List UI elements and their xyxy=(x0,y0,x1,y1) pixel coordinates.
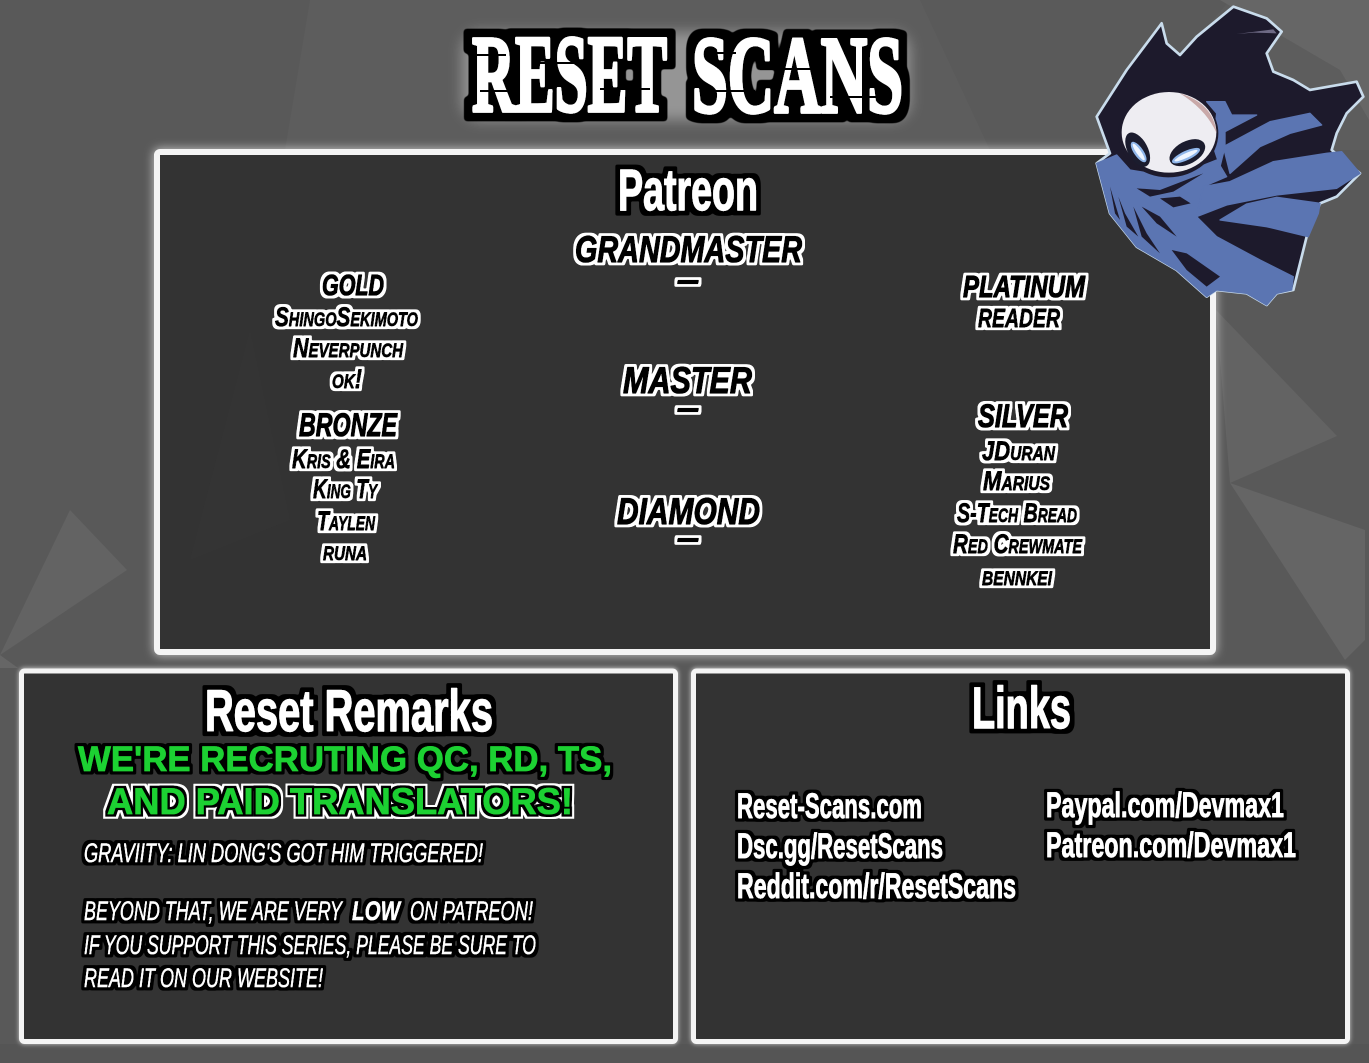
link list: right column xyxy=(1046,786,1296,865)
panel: Links xyxy=(691,668,1350,1044)
recruiting notice line 2: AND PAID TRANSLATORS! xyxy=(107,781,573,822)
tier: Silver: Red Crewmate xyxy=(953,529,1083,559)
remark: Patreon appeal: ON PATREON! xyxy=(410,896,533,926)
title word: RESET: RESET xyxy=(472,13,667,135)
link list: left column: Reset-Scans.com xyxy=(737,787,922,826)
mascot dark cloak xyxy=(1097,7,1363,305)
tier: Grandmaster: GRANDMASTER xyxy=(575,229,802,270)
link list: left column: Dsc.gg/ResetScans xyxy=(737,827,943,866)
tier: Grandmaster xyxy=(575,229,802,297)
tier: Silver: SILVER xyxy=(978,398,1068,434)
title word: SCANS: SCANS xyxy=(692,14,903,136)
tier: Bronze: King Ty xyxy=(313,474,379,504)
tier: Diamond xyxy=(617,491,760,555)
tier: Bronze: Taylen xyxy=(317,506,376,536)
tier: Master: – xyxy=(677,392,699,425)
tier: Gold: GOLD xyxy=(322,270,384,302)
tier: Platinum: READER xyxy=(978,303,1060,333)
tier: Bronze: Kris & Eira xyxy=(292,444,395,474)
mascot blue scarf xyxy=(1097,102,1360,305)
tier: Silver xyxy=(953,398,1083,591)
tier: Silver: Marius xyxy=(983,466,1050,496)
tier: Gold: ShingoSekimoto xyxy=(275,302,418,332)
tier: Gold xyxy=(275,270,418,394)
remark: Gravity: GRAVIITY: LIN DONG'S GOT HIM TRIGGERED! xyxy=(84,838,483,868)
tier: Bronze xyxy=(292,407,398,566)
panel: Patreon supporters xyxy=(154,149,1216,655)
tier: Gold: ok! xyxy=(332,364,362,394)
title: Reset Scans logo xyxy=(462,13,910,136)
remark: Patreon appeal: IF YOU SUPPORT THIS SERIES, PLEASE BE SURE TO xyxy=(84,930,536,960)
tier: Silver: S-Tech Bread xyxy=(957,498,1077,528)
link list: left column xyxy=(737,787,1016,906)
tier: Bronze: BRONZE xyxy=(299,407,398,443)
tier: Silver: JDuran xyxy=(982,436,1056,466)
icon: hooded mascot character xyxy=(1097,7,1363,305)
tier: Grandmaster: – xyxy=(677,264,699,297)
tier: Diamond: – xyxy=(677,522,699,555)
mascot eyes xyxy=(1120,128,1210,172)
heading: Reset Remarks: Reset Remarks xyxy=(205,679,493,744)
recruiting notice line 1: WE'RE RECRUTING QC, RD, TS, xyxy=(78,740,612,779)
tier: Master: MASTER xyxy=(623,360,752,401)
mascot highlight xyxy=(1237,29,1277,34)
remark: Patreon appeal xyxy=(84,896,536,993)
heading: Patreon: Patreon xyxy=(618,158,758,223)
tier: Platinum xyxy=(963,269,1086,333)
links frame xyxy=(694,671,1348,1042)
link list: left column: Reddit.com/r/ResetScans xyxy=(737,867,1016,906)
panel frame xyxy=(157,152,1213,652)
tier: Diamond: DIAMOND xyxy=(617,491,760,532)
tier: Bronze: runa xyxy=(323,536,367,566)
remark: Patreon appeal: READ IT ON OUR WEBSITE! xyxy=(84,963,323,993)
remark: Patreon appeal: LOW xyxy=(352,896,402,926)
tier: Master xyxy=(623,360,752,425)
tier: Silver: bennkei xyxy=(982,561,1053,591)
tier: Gold: Neverpunch xyxy=(293,333,404,363)
panel: Reset Remarks xyxy=(19,668,678,1044)
remark: Patreon appeal: BEYOND THAT, WE ARE VERY xyxy=(84,896,343,926)
heading: Links: Links xyxy=(972,676,1071,741)
tier: Platinum: PLATINUM xyxy=(963,269,1086,304)
mascot scarf shadows xyxy=(1110,173,1220,287)
remarks frame xyxy=(22,671,676,1042)
mascot mask xyxy=(1118,89,1218,177)
